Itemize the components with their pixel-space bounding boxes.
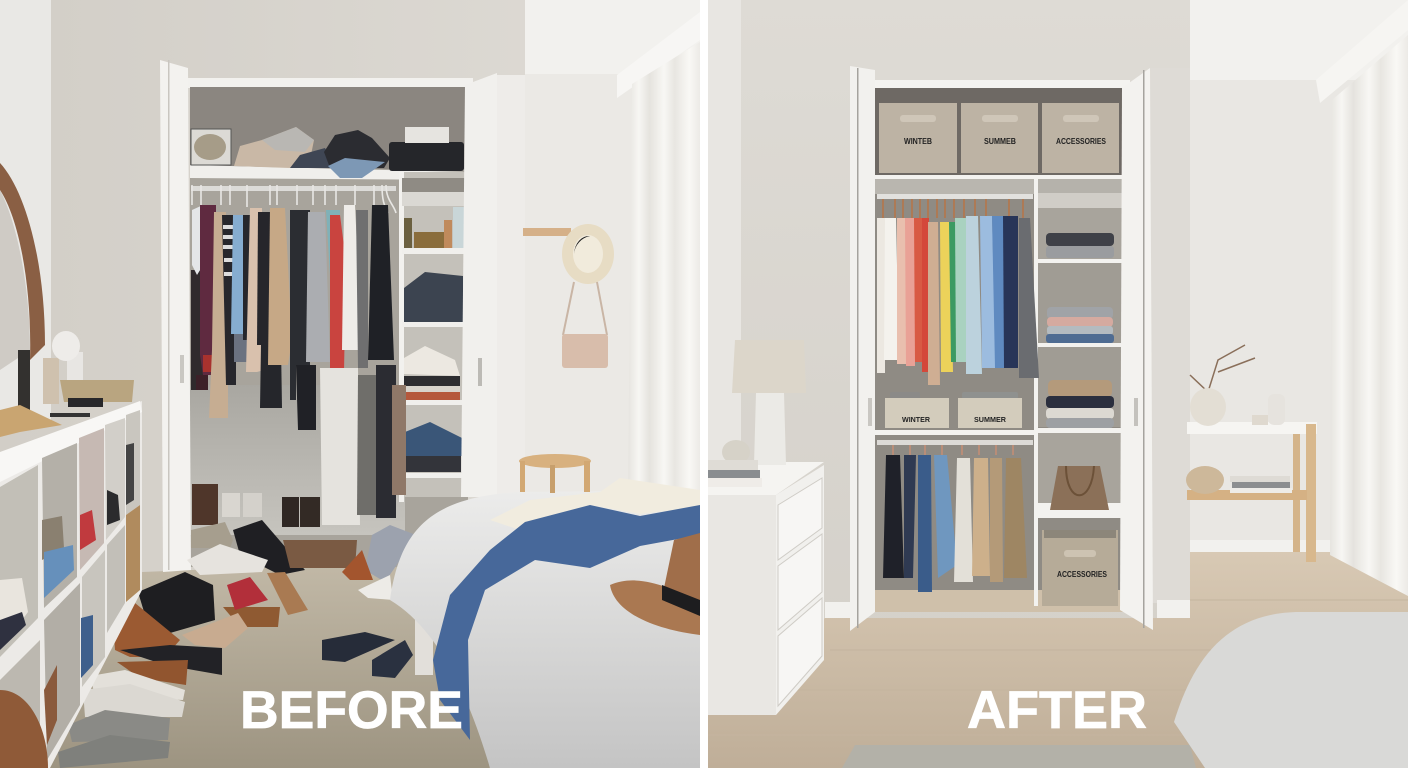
stool [519, 454, 591, 493]
rug [842, 745, 1196, 768]
top storage bins: SUMMEB [984, 137, 1016, 146]
vase and books on dresser [708, 440, 762, 487]
divider [700, 0, 708, 768]
lamp [732, 340, 786, 465]
top storage bins [879, 103, 1119, 173]
door right [461, 73, 497, 497]
middle labelled bins [885, 392, 1022, 428]
curtain [1330, 35, 1408, 596]
folded clothes [1046, 233, 1114, 428]
shoes on closet floor [187, 484, 416, 582]
decor vase and branches [1190, 345, 1285, 426]
mirror [0, 163, 45, 370]
closet [825, 66, 1190, 631]
lower accessories bin [1042, 530, 1118, 606]
bed [390, 478, 700, 768]
middle labelled bins: WINTER [902, 415, 931, 424]
door right [1120, 68, 1153, 630]
top storage bins: WINTEB [904, 137, 932, 146]
middle labelled bins: SUMMER [974, 415, 1007, 424]
after label: AFTER [967, 681, 1147, 740]
door left [850, 66, 875, 631]
room walls and floor [0, 0, 700, 768]
panel: before [0, 0, 700, 768]
console table [1186, 422, 1317, 562]
shelf frame [875, 175, 1123, 606]
closet [160, 60, 525, 572]
top storage bins: ACCESSORIES [1056, 137, 1107, 146]
jeans on bed [433, 505, 700, 740]
panel: after [708, 0, 1408, 768]
lower rail and clothes [877, 440, 1033, 592]
handbag [1050, 466, 1109, 510]
vanity items [0, 331, 134, 437]
rail and colour sorted clothes [877, 194, 1039, 385]
hat on bed [610, 533, 700, 635]
curtain [632, 56, 695, 489]
dresser [708, 462, 824, 715]
peg rail, hat and bag [523, 224, 614, 368]
bed [1174, 612, 1408, 768]
cube shelf [0, 401, 142, 768]
before label: BEFORE [240, 681, 463, 740]
lower accessories bin: ACCESSORIES [1057, 570, 1108, 579]
top shelf and clutter [190, 127, 465, 180]
door left [160, 60, 191, 572]
right shelves [399, 172, 466, 502]
hanging rail and clothes [191, 185, 406, 525]
room walls and floor [708, 0, 1408, 768]
shoes scattered on floor [58, 572, 413, 768]
